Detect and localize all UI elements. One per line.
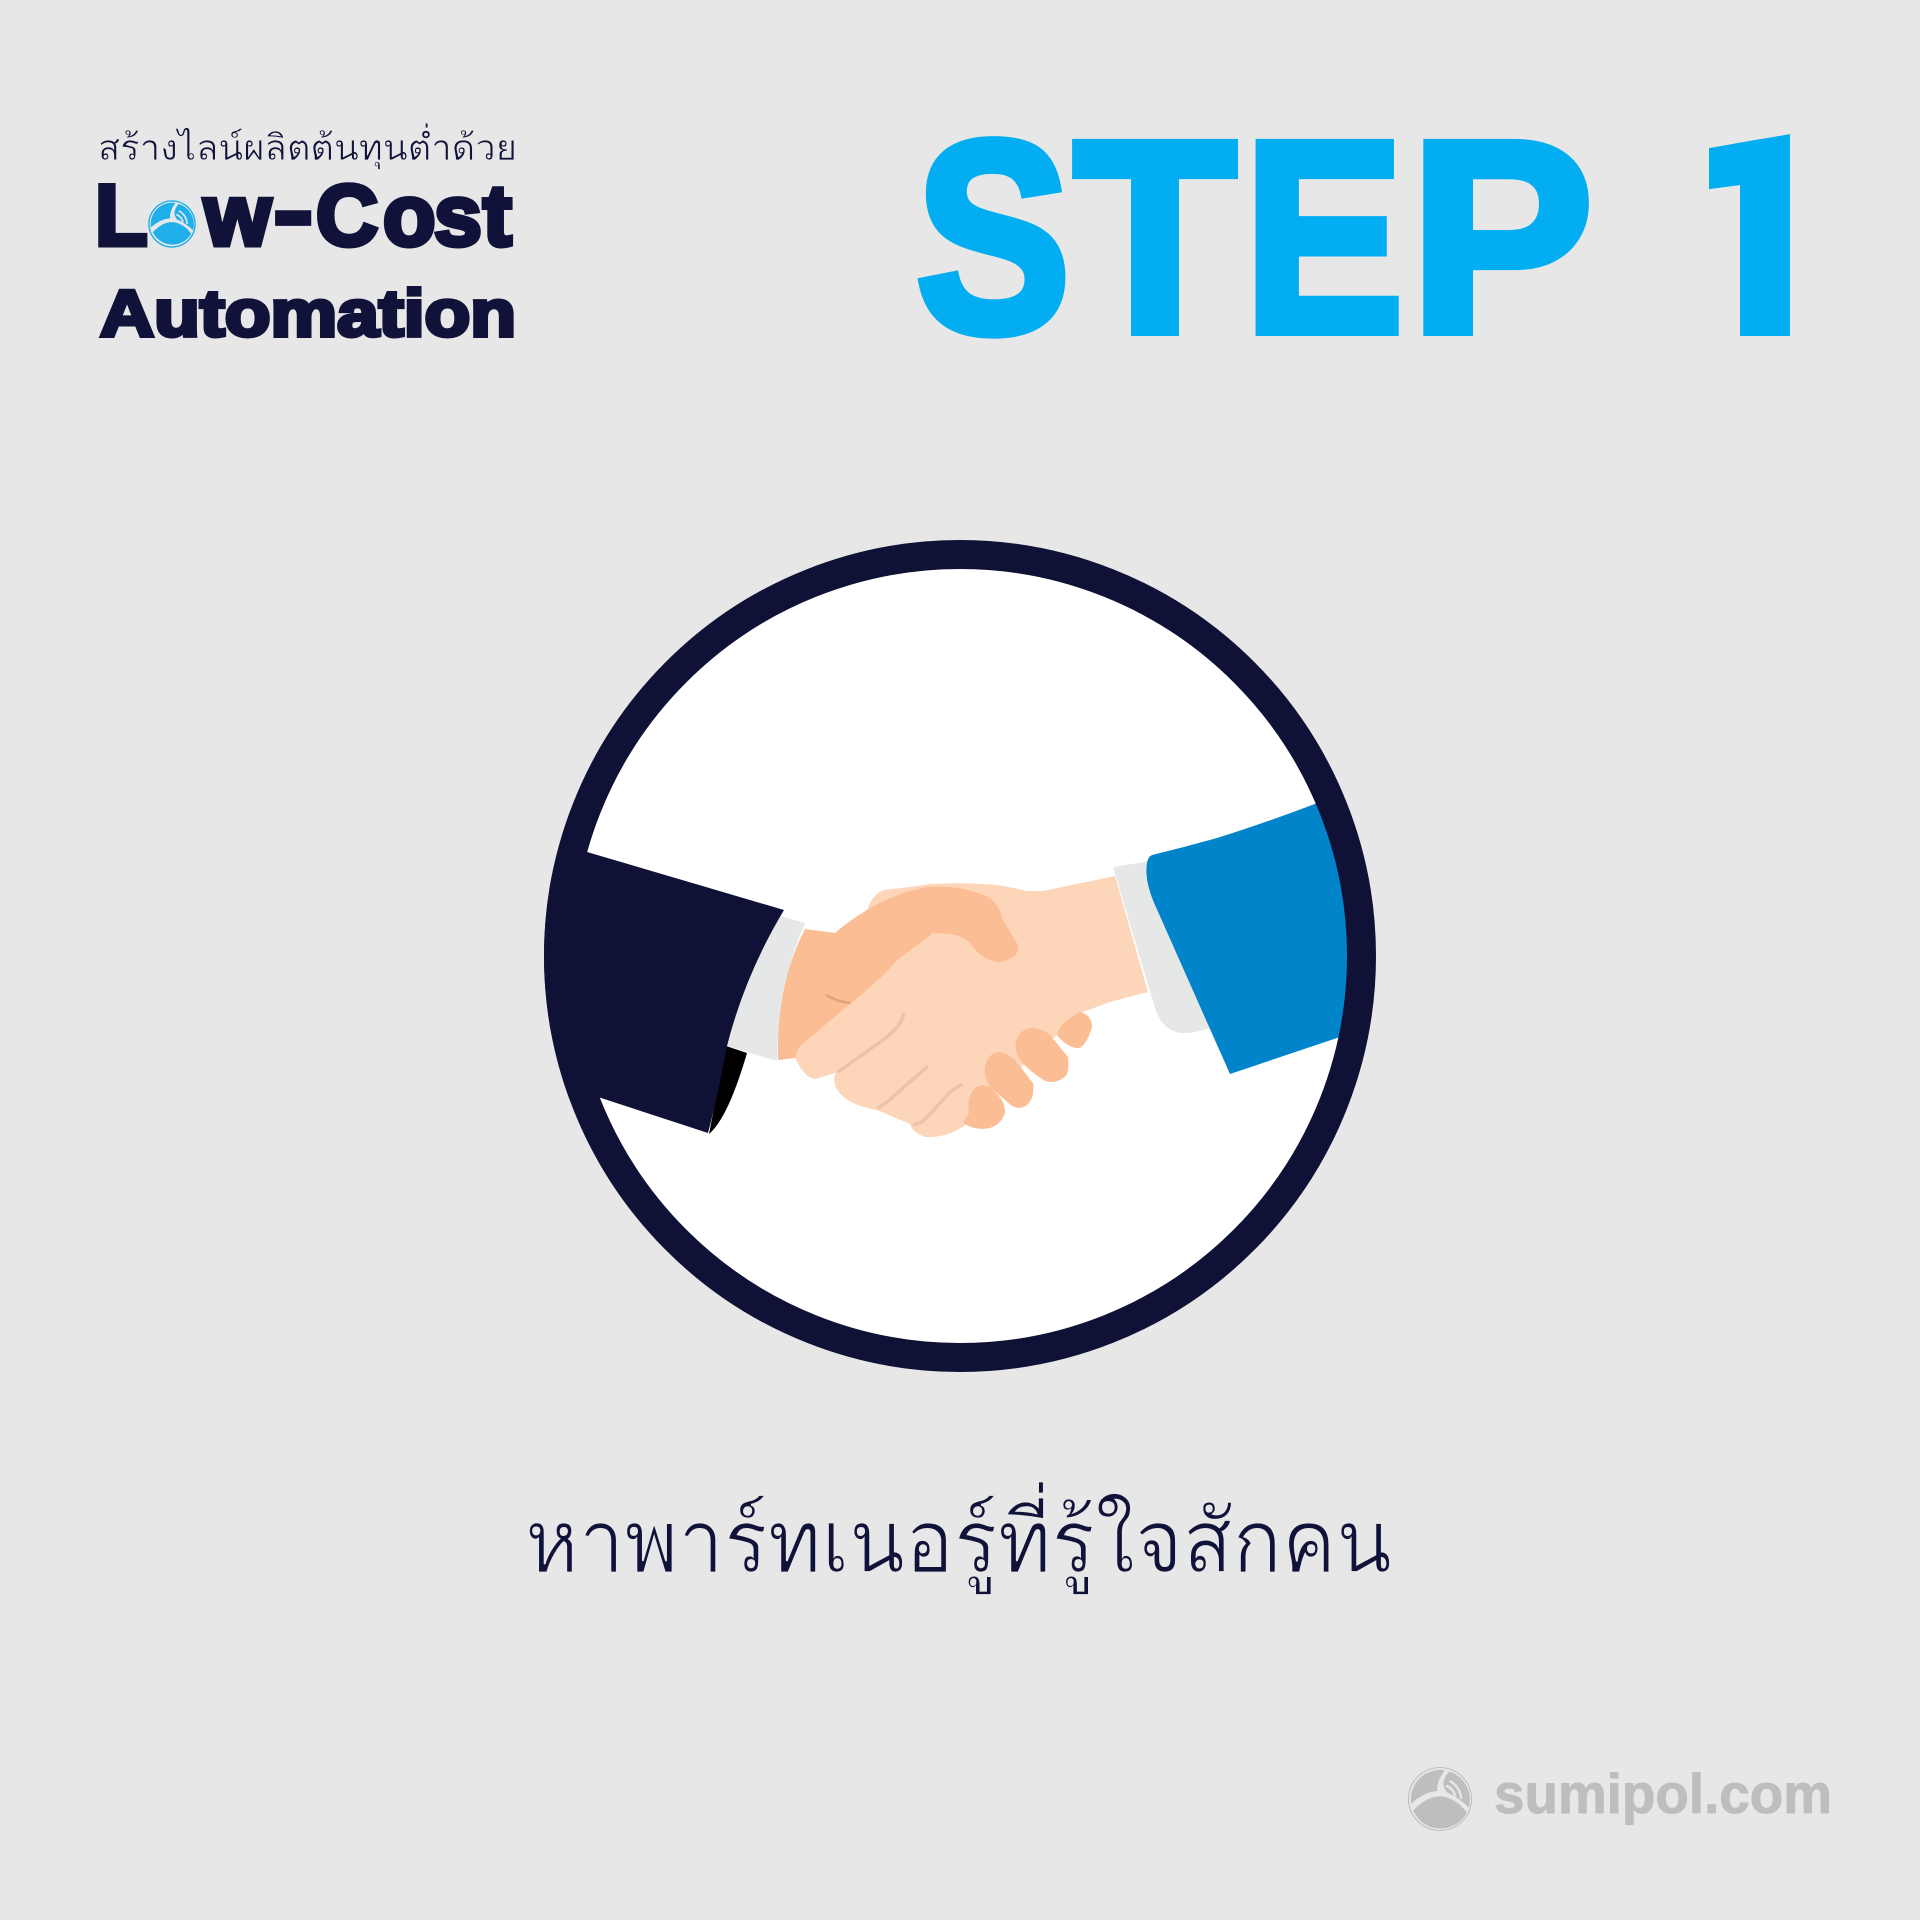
left sleeve	[530, 843, 784, 1133]
heading: STEP 1: S	[916, 85, 1070, 389]
finger 1	[1057, 1012, 1092, 1048]
finger 4	[963, 1085, 1005, 1129]
finger 3	[985, 1052, 1033, 1108]
footer: sumipol.com brand	[1409, 1762, 1832, 1830]
circle ring	[558, 554, 1362, 1358]
dark thumb	[835, 886, 1018, 962]
heading: STEP 1: T	[1074, 85, 1236, 389]
right sleeve	[1146, 804, 1347, 1074]
handshake illustration in circle	[530, 554, 1400, 1358]
heading: STEP 1: E	[1244, 86, 1404, 389]
subtitle: Thai line: สร้างไลน์ผลิตต้นทุนต่ำด้วย	[98, 123, 517, 170]
website text: sumipol.com	[1494, 1762, 1832, 1825]
left cuff	[727, 916, 805, 1061]
heading: STEP 1: 1	[1667, 86, 1846, 390]
icon: blue sumipol logo	[149, 201, 195, 247]
title: Automation: Automation	[100, 276, 516, 350]
title: Low-Cost	[95, 155, 512, 266]
icon: grey sumipol logo	[1409, 1768, 1471, 1830]
left sleeve lining	[709, 1046, 747, 1134]
title: Low-Cost: w	[203, 168, 272, 264]
light hand back sliver	[868, 883, 997, 910]
crease on dark palm	[826, 995, 851, 1003]
knuckle creases	[838, 1013, 962, 1125]
circle background	[558, 554, 1362, 1358]
dark wrist and palm	[778, 910, 925, 1060]
right cuff	[1113, 861, 1210, 1033]
title: Low-Cost: L	[95, 168, 148, 264]
light hand	[796, 876, 1148, 1137]
finger 2	[1015, 1028, 1068, 1082]
heading: Low-Cost Automation	[95, 123, 517, 350]
title: Low-Cost: –	[275, 155, 311, 266]
title: Low-Cost: Cost	[316, 168, 512, 264]
heading: STEP 1	[918, 134, 1790, 339]
heading: STEP 1: P	[1410, 85, 1593, 389]
caption: Thai text: หาพาร์ทเนอรู์ที่รู้ใจสักคน	[525, 1481, 1392, 1595]
